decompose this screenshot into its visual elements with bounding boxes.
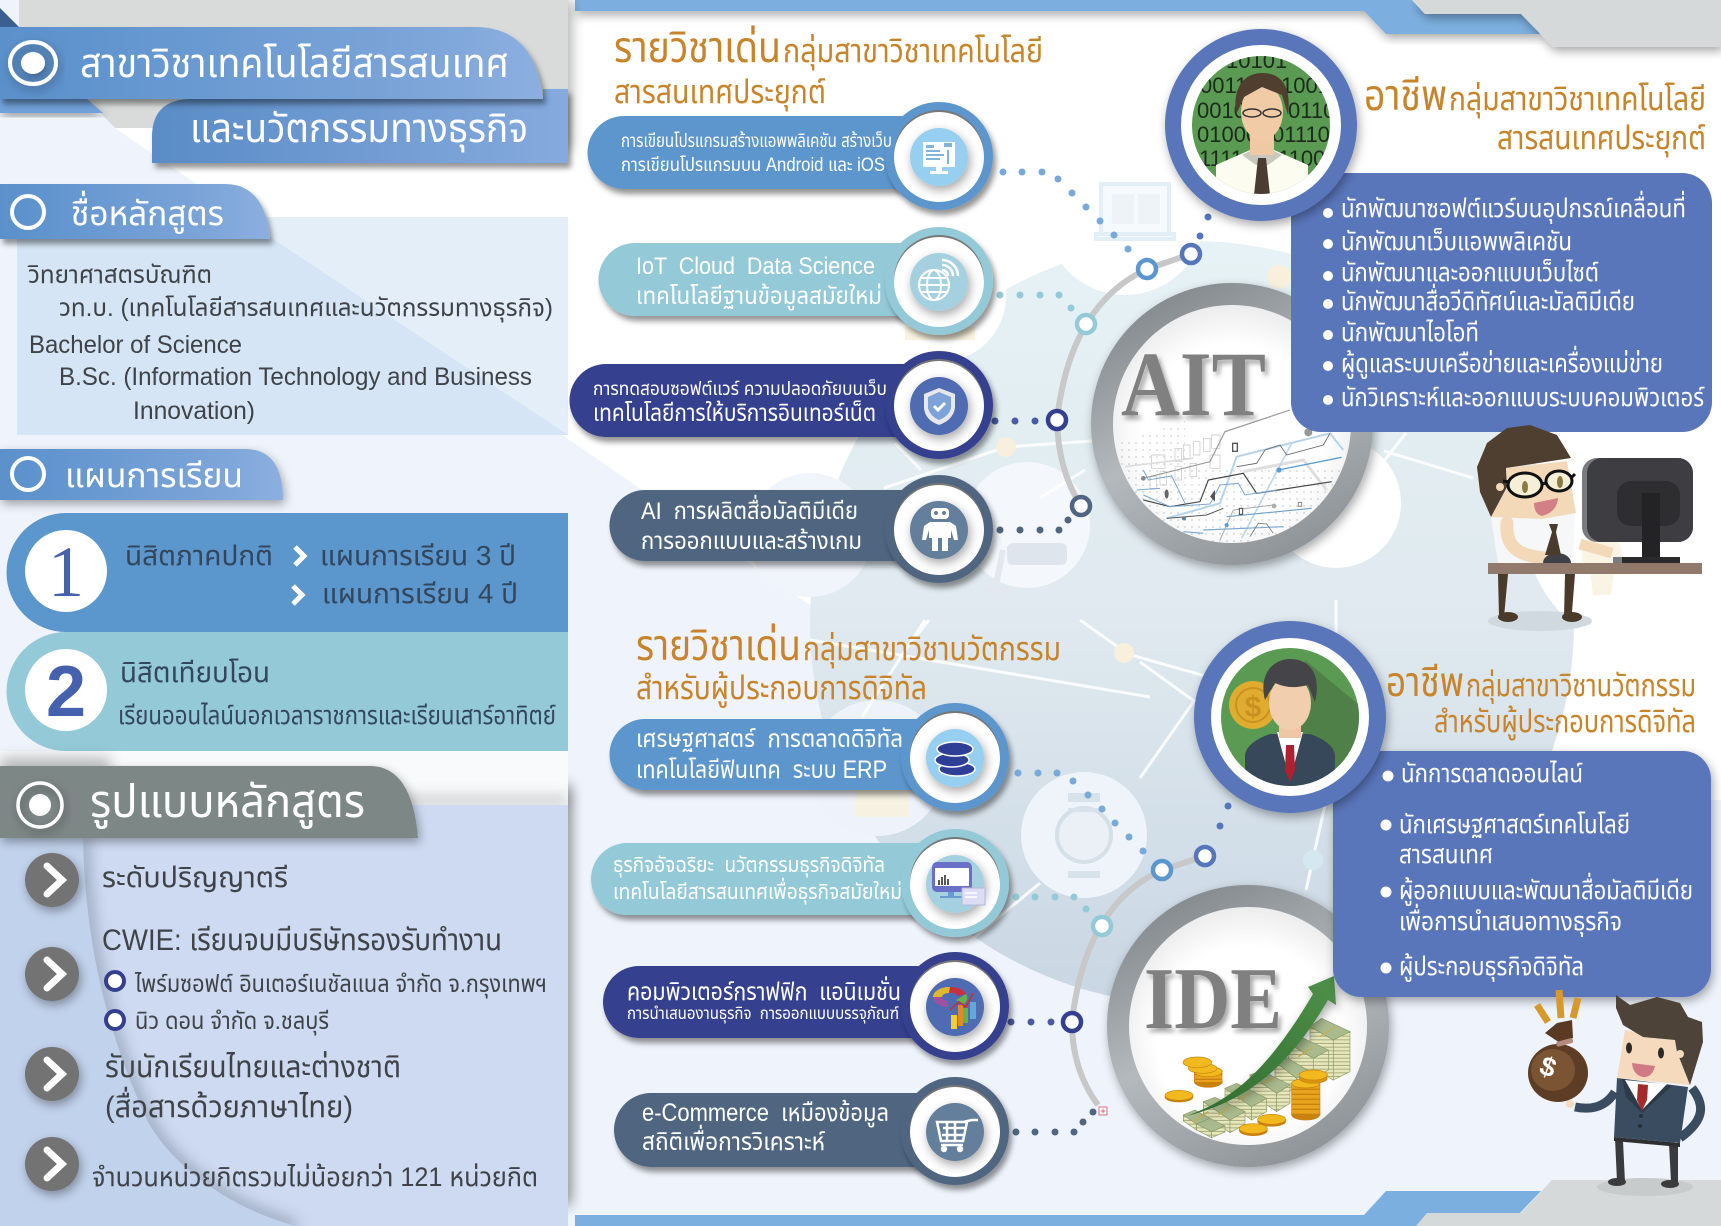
course pill: programming [588,102,993,210]
icon: computer [923,142,955,174]
text: IDE career list: เพื่อการนำเสนอทางธุรกิจ [1399,903,1622,937]
text: degree names: Bachelor of Science [29,331,242,359]
text: IDE career list: นักเศรษฐศาสตร์เทคโนโลยี [1399,809,1630,839]
icon: chevrons [293,547,304,604]
icon: globe [919,260,958,300]
portrait: IT professional: 1001 [1281,73,1330,98]
text: AIT career list: นักพัฒนาสื่อวีดิทัศน์และมัลติมีเดีย [1341,283,1635,316]
course pill: AI: AI การผลิตสื่อมัลติมีเดีย [641,494,858,525]
portrait: IT professional: 10101 [1226,48,1287,73]
text: IDE career list: ผู้ประกอบธุรกิจดิจิทัล [1399,951,1584,982]
monitor [1582,458,1693,563]
panel: IDE careers [1333,751,1711,997]
item: CWIE: ไพร์มซอฟต์ อินเตอร์เนชัลแนล จำกัด จ.กรุงเทพฯ [134,971,547,999]
icon: shield [924,388,955,425]
course pill: e-commerce: e-Commerce เหมืองข้อมูล [642,1099,889,1128]
title banner line 1 [0,27,543,99]
course pill: e-commerce: สถิติเพื่อการวิเคราะห์ [642,1124,826,1156]
money stacks and coins [1165,1018,1350,1138]
portrait: IT professional: 00101 [1197,98,1258,123]
course pill: digital business [591,829,1009,937]
course pill: digital business: เทคโนโลยีสารสนเทศเพื่อธุรกิจสมัยใหม่ [613,877,902,905]
text: IDE career list: สารสนเทศ [1399,839,1493,869]
IDE circle [1107,885,1389,1167]
title banner line 2 [152,89,568,163]
text: IDE career list [1399,758,1693,982]
heading: program format: รูปแบบหลักสูตร [90,775,365,829]
icon: title radio [10,42,56,84]
course pill: graphics: การนำเสนองานธุรกิจ การออกแบบบรรจุภัณฑ์ [627,1004,899,1024]
connector arc: AIT [992,168,1212,534]
heading: AIT featured courses: สารสนเทศประยุกต์ [614,73,826,112]
heading: AIT careers: อาชีพ [1364,72,1447,120]
item: CWIE: CWIE: เรียนจบมีบริษัทรองรับทำงาน [102,924,502,957]
IDE label: IDE [1144,951,1282,1048]
top decorative bars [575,0,1721,47]
text: IDE career list: นักการตลาดออนไลน์ [1401,758,1583,788]
course pill: digital business: ธุรกิจอัจฉริยะ นวัตกรรมธุรกิจดิจิทัล [613,854,885,878]
course pill: AI [610,475,993,583]
portrait: IT professional: 0011 [1200,73,1247,98]
icon: dashboard [932,862,985,905]
heading: IDE featured courses [636,622,1061,708]
heading: AIT featured courses: รายวิชาเด่น [614,24,781,72]
growth arrow [1187,976,1336,1116]
text: degree names [28,261,553,425]
icon: charts [933,987,976,1029]
icon: cart [937,1120,978,1151]
item: CWIE [25,924,547,1036]
text: AIT career list: นักพัฒนาเว็บแอพพลิเคชัน [1341,226,1572,256]
connector arc: IDE [1008,770,1232,1136]
icon: money bag: $ [1536,1050,1560,1084]
course pill: programming: การเขียนโปรแกรมสร้างแอพพลิเคชัน สร้างเว็บ [621,129,892,152]
heading: AIT featured courses [614,24,1043,112]
icon: coins [935,742,975,776]
course pill: security: การทดสอบซอฟต์แวร์ ความปลอดภัยบนเว็บ [593,379,887,400]
AIT circle [1091,283,1373,565]
text: degree names: B.Sc. (Information Technology and Business [59,363,532,391]
item: credits: จำนวนหน่วยกิตรวมไม่น้อยกว่า 121 หน่วยกิต [92,1162,538,1192]
course pill: e-commerce [614,1077,1009,1185]
plan row 2: เรียนออนไลน์นอกเวลาราชการและเรียนเสาร์อาทิตย์ [118,700,556,730]
course pill: graphics [603,952,1009,1060]
item: CWIE: นิว ดอน จำกัด จ.ชลบุรี [135,1008,329,1036]
portrait: IT professional: 01110 [1272,122,1330,147]
course pill: security: เทคโนโลยีการให้บริการอินเทอร์เน็ต [593,399,876,427]
panel: program format [0,751,568,1226]
text: degree names: Innovation) [133,397,255,425]
portrait: IT professional: 0110 [1288,98,1335,123]
plan row 1: 1 [48,532,84,612]
heading: AIT careers [1364,72,1706,158]
item: degree level [25,853,288,907]
text: degree names: วิทยาศาสตรบัณฑิต [28,261,212,289]
text: AIT career list: นักพัฒนาไอโอที [1341,317,1479,347]
course pill: economics: เทคโนโลยีฟินเทค ระบบ ERP [636,756,887,784]
course pill: graphics: คอมพิวเตอร์กราฟฟิก แอนิเมชั่น [627,975,901,1006]
left column shadow [558,0,570,1205]
heading: course name: ชื่อหลักสูตร [71,190,224,234]
heading: program format [0,766,418,838]
text: AIT career list: ผู้ดูแลระบบเครือข่ายและเครื่องแม่ข่าย [1341,345,1663,379]
heading: study plan [0,449,283,500]
portrait: IT professional: 1111 [1199,146,1243,171]
item: credits [25,1137,538,1192]
character: man at computer [1477,425,1702,631]
course pill: IoT [598,227,993,335]
course pill: security [570,351,993,459]
plan row 2: นิสิตเทียบโอน [120,657,270,689]
plan row 2 [7,632,568,751]
grey top-left corner [0,0,568,128]
course pill: AI: การออกแบบและสร้างเกม [641,528,862,555]
course pill: economics: เศรษฐศาสตร์ การตลาดดิจิทัล [636,725,903,753]
portrait: IT professional [1165,29,1357,221]
heading: AIT featured courses: กลุ่มสาขาวิชาเทคโนโลยี [783,32,1043,71]
item: students [25,1047,401,1124]
heading: IDE featured courses: สำหรับผู้ประกอบการดิจิทัล [636,669,927,708]
portrait: IT professional: 1100 [1278,146,1325,171]
panel: AIT careers [1291,173,1712,432]
heading: IDE featured courses: รายวิชาเด่น [636,622,801,670]
plan row 1: นิสิตภาคปกติ [125,540,273,571]
heading: course name [0,184,270,239]
heading: study plan: แผนการเรียน [65,457,243,495]
heading: IDE careers [1386,659,1696,740]
text: degree names: วท.บ. (เทคโนโลยีสารสนเทศและนวัตกรรมทางธุรกิจ) [59,294,553,323]
circuit artwork [1115,410,1345,545]
icon: money bag [1528,990,1588,1102]
panel: course name [0,184,568,435]
item: degree level: ระดับปริญญาตรี [102,862,288,894]
AIT label: AIT [1121,333,1266,435]
item: students: (สื่อสารด้วยภาษาไทย) [105,1086,353,1124]
text: AIT career list: นักพัฒนาและออกแบบเว็บไซต์ [1341,257,1599,287]
faint lightbulb [1582,535,1622,595]
title banner line 1: สาขาวิชาเทคโนโลยีสารสนเทศ [80,42,509,86]
icon: robot [922,508,958,551]
plan row 2: 2 [46,652,86,732]
course pill: IoT: เทคโนโลยีฐานข้อมูลสมัยใหม่ [636,282,882,311]
plan row 1: แผนการเรียน 4 ปี [322,578,518,609]
plan row 1 [7,513,568,632]
course pill: economics [610,703,1009,811]
heading: IDE featured courses: กลุ่มสาขาวิชานวัตกรรม [803,630,1061,669]
character: businessman with money bag [1528,990,1703,1196]
portrait: IT professional: 01000 [1197,122,1258,147]
item: students: รับนักเรียนไทยและต่างชาติ [105,1051,401,1084]
bottom decorative bars [575,1180,1721,1226]
course pill: programming: การเขียนโปรแกรมบน Android และ iOS [621,155,885,176]
plan row 1: แผนการเรียน 3 ปี [320,540,516,571]
text: AIT career list [1341,190,1705,412]
title banner line 2: และนวัตกรรมทางธุรกิจ [190,107,528,152]
course pill: IoT: IoT Cloud Data Science [636,253,875,280]
portrait: businessman: $ [1245,691,1262,724]
heading: IDE careers: อาชีพ [1386,659,1464,705]
portrait: businessman [1194,621,1386,813]
